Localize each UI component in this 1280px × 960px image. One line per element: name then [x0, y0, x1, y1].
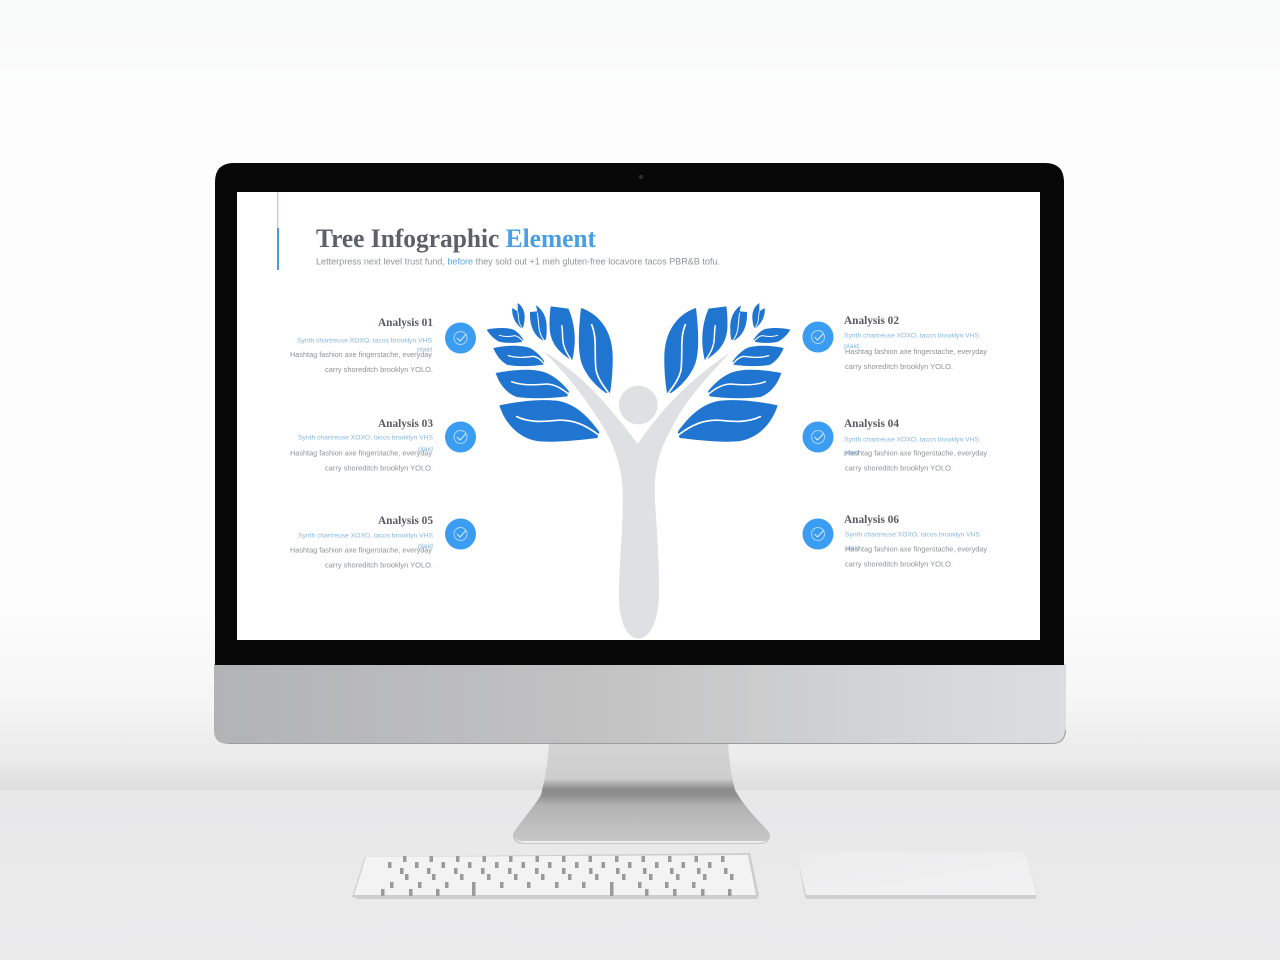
monitor stand [513, 742, 770, 844]
block: Analysis 01: Synth chartreuse XOXO, tacos brooklyn VHS [297, 338, 432, 344]
block: Analysis 01: Hashtag fashion axe fingerstache, everyday [290, 350, 432, 359]
icon: check 02 [802, 322, 834, 352]
block: Analysis 04: carry shoreditch brooklyn YOLO. [845, 464, 953, 472]
block: Analysis 01: plaid [417, 346, 433, 354]
block: Analysis 02: Hashtag fashion axe fingerstache, everyday [845, 347, 987, 356]
block: Analysis 05: Hashtag fashion axe fingerstache, everyday [290, 546, 432, 554]
right leaves [664, 303, 790, 442]
icon: check 01 [445, 322, 476, 354]
block: Analysis 02: carry shoreditch brooklyn YOLO. [845, 362, 953, 371]
block: Analysis 03: Synth chartreuse XOXO, tacos brooklyn VHS [298, 434, 433, 442]
keyboard [352, 853, 759, 899]
block: Analysis 02: plaid [844, 343, 860, 350]
block: Analysis 04 [844, 416, 987, 472]
block: Analysis 01: Analysis 01 [378, 315, 433, 329]
block: Analysis 06: plaid [845, 545, 861, 552]
icon: check 04 [802, 422, 834, 452]
icon: check 03 [445, 422, 476, 452]
block: Analysis 05 [290, 513, 434, 570]
block: Analysis 02 [844, 313, 987, 371]
block: Analysis 06: carry shoreditch brooklyn YOLO. [845, 560, 953, 568]
block: Analysis 05: carry shoreditch brooklyn YOLO. [325, 560, 433, 570]
block: Analysis 01: carry shoreditch brooklyn YOLO. [325, 365, 433, 374]
block: Analysis 04: Synth chartreuse XOXO, tacos brooklyn VHS [844, 436, 979, 444]
header accent bar [277, 192, 279, 270]
block: Analysis 06: Hashtag fashion axe fingerstache, everyday [845, 544, 987, 554]
tree body figure [543, 352, 730, 638]
block: Analysis 06 [844, 512, 987, 568]
block: Analysis 02: Synth chartreuse XOXO, tacos brooklyn VHS [844, 332, 979, 340]
block: Analysis 05: plaid [418, 543, 434, 550]
block: Analysis 04: Analysis 04 [844, 416, 899, 430]
block: Analysis 03: Analysis 03 [378, 416, 433, 430]
block: Analysis 03 [290, 416, 434, 472]
block: Analysis 03: carry shoreditch brooklyn YOLO. [325, 464, 433, 472]
tree infographic [487, 303, 790, 638]
block: Analysis 06: Analysis 06 [844, 512, 899, 526]
trackpad [797, 852, 1037, 899]
webcam [639, 175, 643, 179]
subtitle: Letterpress next level trust fund, before they sold out +1 meh gluten-free locavore tacos PBR&B tofu. [316, 256, 720, 266]
title: Tree Infographic Element [316, 224, 596, 253]
block: Analysis 05: Synth chartreuse XOXO, tacos brooklyn VHS [298, 532, 433, 540]
icon: check 06 [802, 518, 834, 550]
screen [237, 192, 1040, 640]
block: Analysis 03: plaid [418, 446, 434, 453]
left leaves [487, 303, 613, 442]
block: Analysis 06: Synth chartreuse XOXO, tacos brooklyn VHS [845, 532, 980, 538]
block: Analysis 01 [290, 315, 433, 374]
block: Analysis 04: Hashtag fashion axe fingerstache, everyday [845, 448, 987, 458]
monitor chin [214, 664, 1066, 744]
block: Analysis 05: Analysis 05 [378, 513, 433, 527]
block: Analysis 02: Analysis 02 [844, 313, 899, 327]
block: Analysis 03: Hashtag fashion axe fingerstache, everyday [290, 448, 432, 458]
monitor bezel [215, 163, 1064, 665]
block: Analysis 04: plaid [844, 450, 860, 456]
icon: check 05 [445, 518, 476, 550]
